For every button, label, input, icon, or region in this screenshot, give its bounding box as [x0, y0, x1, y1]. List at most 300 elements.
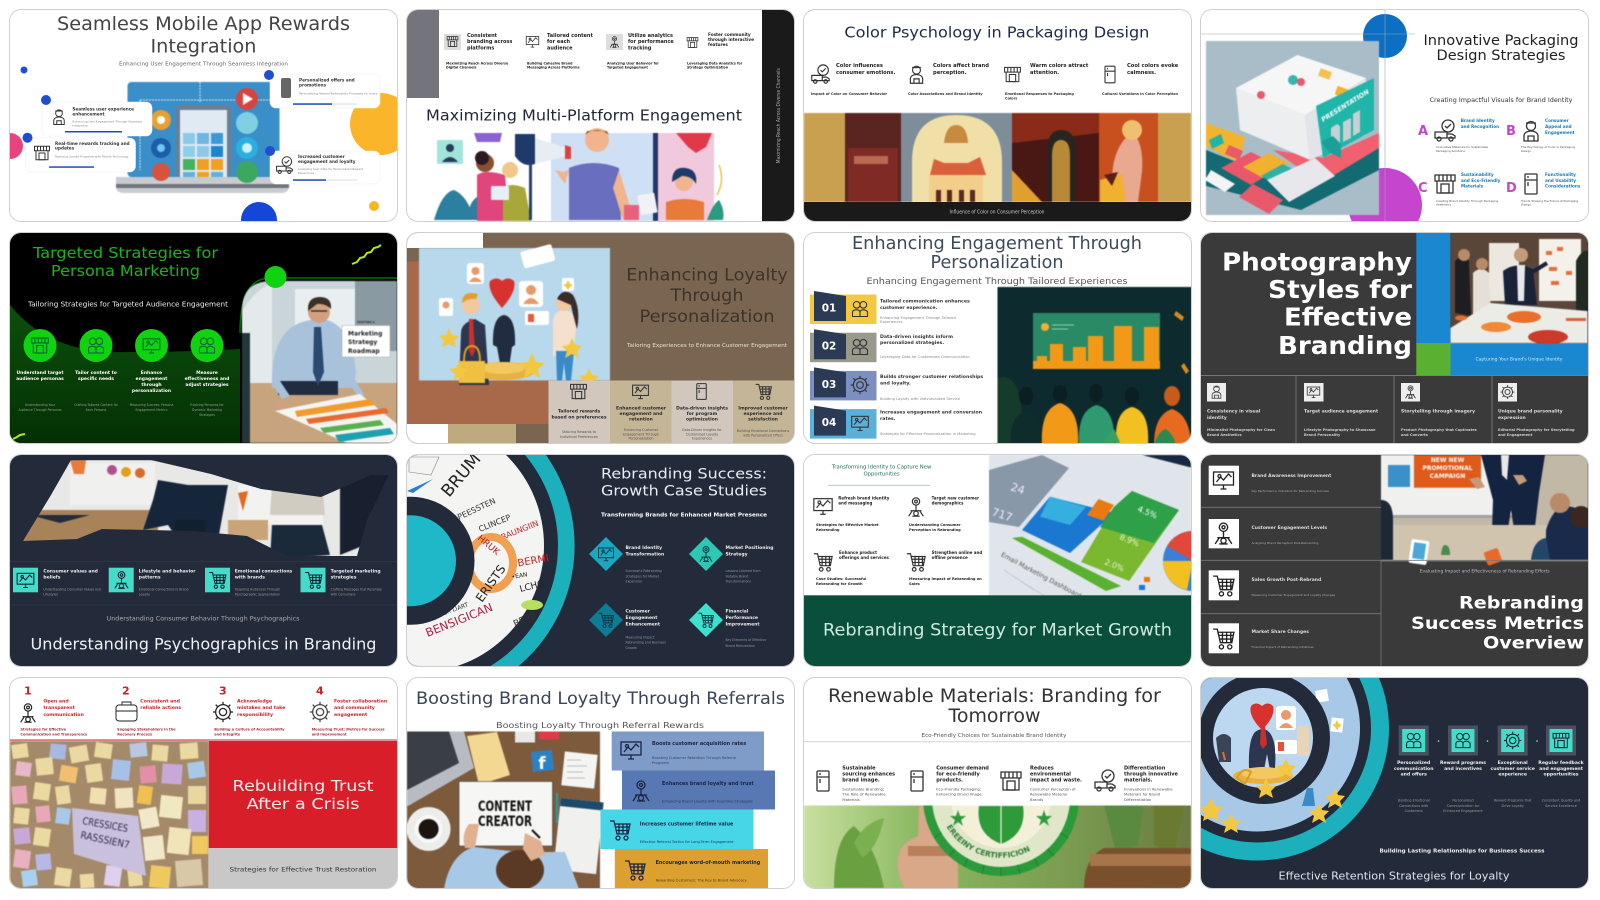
title: Enhancing Loyalty [626, 265, 788, 284]
photo: wall of sticky notes [10, 740, 209, 888]
item: differentiation through materials: Differentiation [1124, 765, 1166, 771]
step 3: Acknowledge [237, 698, 272, 704]
panel: Rebranding Success Growth Case Studies [407, 455, 794, 666]
photo: torn banner of presenters [23, 460, 393, 560]
title: Through [669, 286, 744, 304]
item B: The Psychology of Color in Packaging [1520, 145, 1575, 149]
item: financial performance improvement [689, 603, 766, 648]
item: differentiation through materials: materials. [1124, 777, 1153, 783]
item: consistency in visual identity: identity [1207, 414, 1227, 420]
step 1: 1 [24, 684, 32, 697]
caption band [804, 202, 1191, 221]
item: target new demographics: demographics [932, 500, 964, 506]
item C [1418, 172, 1501, 206]
title: Success Metrics [1411, 614, 1584, 634]
callout: Increased customer engagement and loyalty [265, 146, 380, 184]
photo: green certification rosette [804, 804, 1191, 888]
item: targeted marketing strategies: with Consumers [331, 592, 356, 596]
item D: Considerations [1545, 184, 1581, 188]
item D: Trends Shaping the Future of Packaging [1520, 199, 1578, 203]
item: differentiation through materials: Differentiation [1124, 796, 1152, 802]
column: regular feedback: Regular feedback [1538, 760, 1585, 766]
column: regular feedback: Service Excellence [1545, 803, 1577, 807]
step: measure effectiveness: adjust strategies [185, 382, 229, 388]
column: personalized communication: Connections with [1399, 803, 1428, 807]
row: market share changes: Market Share Changes [1252, 629, 1309, 635]
concentric rings with whiteboard photo: ERISTS [473, 562, 509, 605]
item: customer engagement enhancement: Measuring Impact: [626, 635, 655, 639]
item: lifestyle and behavior patterns: Loyalty [139, 592, 150, 596]
column: reward programs: Reward programs [1440, 760, 1486, 766]
callout: Increased customer engagement and loyalty: Experience [298, 171, 314, 175]
step: measure effectiveness: Evolving Personas for [190, 402, 224, 406]
column: tailored rewards: Tailored rewards [558, 408, 600, 414]
item: target new demographics: Target new customer [932, 496, 979, 500]
item: unique brand personality: Unique brand personality [1498, 408, 1563, 414]
item: brand identity transformation: Strategies for Market [626, 574, 660, 578]
caption: Capturing Your Brand's Unique Identity [1476, 356, 1563, 362]
title [57, 13, 350, 58]
column: data-driven insights: Customized Loyalty [686, 432, 718, 436]
step 4: Foster collaboration [334, 698, 387, 704]
item D: Design [1521, 202, 1531, 206]
item: cool colors evoke calmness: Cultural Variations in Color Perception [1102, 92, 1178, 96]
callout: Seamless user experience enhancement: enhancement [72, 112, 105, 117]
item: enhance product offerings: Case Studies: Successful [816, 577, 866, 581]
item A: Packaging Solutions [1436, 149, 1465, 153]
item: utilize analytics: tracking [628, 46, 652, 52]
item D: Functionality [1545, 172, 1576, 177]
concentric rings with whiteboard photo: PEESSTEN [456, 496, 497, 522]
column: reward programs: Personalized [1452, 798, 1474, 802]
panel: Rebranding Success Metrics Overview [1201, 455, 1588, 666]
concentric rings with whiteboard photo: RAUNGIIN [500, 519, 540, 542]
item: lifestyle and behavior patterns: Emotional Connections in Brand [139, 588, 188, 592]
item: storytelling through imagery [1401, 382, 1477, 436]
title panel: After a Crisis [246, 794, 360, 812]
step 3: mistakes and take [237, 704, 285, 710]
row: sales growth post-rebrand: Sales Growth Post-Rebrand [1252, 577, 1321, 583]
panel: Enhancing Engagement Through Personalization [804, 232, 1191, 443]
step block: boosts customer acquisition [612, 731, 764, 770]
panel: Photography Styles for Effective Branding [1201, 232, 1588, 443]
item: refresh brand identity: and messaging [838, 500, 873, 506]
step: measure effectiveness: Dynamic Marketing [192, 408, 222, 412]
divider lines [1201, 375, 1588, 443]
step: tailor content: specific needs [78, 376, 114, 382]
subtitle: Eco-Friendly Choices for Sustainable Brand Identity [922, 733, 1067, 739]
title: Overview [1483, 633, 1584, 653]
item: consumer values and beliefs: Consumer values and [43, 568, 98, 574]
item: customer engagement enhancement: Growth [626, 646, 637, 650]
column: reward programs: Enhanced Engagement [1443, 808, 1483, 812]
photo: team at whiteboards [1450, 232, 1588, 344]
title: Color Psychology in Packaging Design [844, 23, 1149, 41]
title: Understanding Psychographics in Branding [30, 634, 376, 653]
item: consumer demand: for eco-friendly [936, 771, 980, 777]
step: understand target personas: Audience Through Personas [18, 408, 62, 412]
item: color influences emotions: consumer emotions. [836, 70, 895, 76]
item C: and Eco-Friendly [1461, 178, 1501, 183]
item: warm colors attract attention [1005, 63, 1089, 100]
item B [1506, 118, 1575, 153]
connector dots [1438, 740, 1538, 741]
title band: Rebranding Strategy for Market Growth [823, 621, 1172, 641]
title: Targeted Strategies for [32, 244, 219, 262]
item: brand identity transformation: Expansion [626, 579, 642, 583]
title band [804, 595, 1191, 666]
step block: boosts customer acquisition: Programs [652, 760, 669, 764]
title: Branding [1278, 330, 1412, 360]
item: colors affect brand perception: Color Associations and Brand Identity [908, 92, 983, 96]
item: emotional connections with brands: with brands [235, 574, 265, 580]
step: measure effectiveness: Strategies [199, 412, 215, 416]
step 03: Building Loyalty with Individualized Service [880, 396, 961, 400]
step 1: Communication and Transparency [20, 732, 88, 736]
item: financial performance improvement: Financial [726, 608, 749, 614]
item: consumer demand: products. [936, 777, 963, 783]
column: enhanced customer engagement: Engagement Through [623, 432, 659, 436]
column: exceptional customer service: Exceptional [1498, 760, 1528, 766]
item: consistent branding: branding across [467, 39, 512, 45]
item D [1506, 172, 1581, 206]
step 03: Builds stronger customer relationships [880, 374, 983, 380]
column: personalized communication: and offers [1401, 771, 1427, 777]
subtitle: Transforming Identity to Capture New [831, 464, 932, 470]
callout: Personalized offers and promotions: promotions [299, 83, 326, 88]
column: regular feedback [1538, 725, 1585, 807]
item B: Engagement [1545, 130, 1575, 135]
photo: wall of sticky notes: CRESSICES [81, 816, 129, 834]
column: regular feedback: opportunities [1543, 771, 1579, 777]
concentric rings with whiteboard photo: MER LIART [437, 601, 470, 619]
item: cool colors evoke calmness: Cool colors evoke [1127, 63, 1179, 69]
callout: Increased customer engagement and loyalty: Increased customer [298, 154, 346, 159]
row dividers [1201, 507, 1588, 666]
photo: promotional campaign presentation [1381, 455, 1592, 566]
title: Integration [150, 36, 256, 58]
row: brand awareness improvement [1209, 466, 1332, 495]
item A: Brand Identity [1461, 118, 1495, 123]
photo: man planning marketing roadmap: CRAFTING A [357, 320, 375, 324]
step 1: Open and [43, 698, 69, 704]
title [1411, 593, 1584, 653]
item B: Appeal and [1545, 124, 1572, 129]
concentric rings with whiteboard photo: .BERMI [514, 553, 550, 570]
concentric rings with whiteboard photo: LCHG [519, 579, 545, 595]
item: sustainable sourcing: sourcing enhances [842, 771, 895, 777]
panel: Rebuilding Trust After a Crisis [10, 678, 397, 888]
grey corner block [407, 10, 439, 98]
column: reward programs: and incentives [1444, 766, 1482, 772]
item: market positioning strategy: Notable Brand [726, 574, 748, 578]
photo: email marketing dashboard: 4.5% [1136, 505, 1159, 521]
column: data-driven insights [672, 380, 733, 443]
item: cool colors evoke calmness: calmness. [1127, 70, 1156, 76]
title: Design Strategies [1436, 48, 1566, 64]
item: unique brand personality: expression [1498, 414, 1526, 420]
concentric rings with whiteboard photo [259, 388, 575, 703]
title: Effective Retention Strategies for Loyalty [1278, 869, 1510, 882]
step: enhance engagement: Measuring Success: Persona [130, 402, 174, 406]
item: targeted marketing strategies [300, 568, 382, 596]
illustration: audience watching bar chart [998, 286, 1192, 444]
column: exceptional customer service: customer service [1491, 766, 1535, 772]
item: market positioning strategy [689, 537, 773, 583]
item: unique brand personality: and Engagement [1498, 432, 1533, 436]
green wave background [10, 304, 240, 444]
subtitle: Evaluating Impact and Effectiveness of Rebranding Efforts [1420, 568, 1550, 573]
column: improved customer experience [733, 380, 794, 443]
item: financial performance improvement: Key Elements of Effective [726, 638, 766, 642]
item: refresh brand identity: Rebranding [816, 528, 840, 532]
item: lifestyle and behavior patterns: patterns [139, 574, 161, 580]
subtitle: Transforming Brands for Enhanced Market Presence [601, 512, 767, 518]
item: warm colors attract attention: Warm colors attract [1030, 63, 1089, 69]
photo: man planning marketing roadmap [242, 280, 397, 442]
divider [804, 740, 1191, 742]
column: regular feedback: and engagement [1539, 766, 1584, 772]
item: reduces environmental impact: impact and waste. [1030, 777, 1082, 783]
item: emotional connections with brands: Targeting Audiences Through [234, 588, 280, 592]
concentric rings with loyalty illustration [1125, 596, 1389, 860]
step block: increases lifetime value: Effective Referral Tactics for Long-Term Engagement [640, 840, 734, 844]
step 02: 02 [822, 340, 836, 352]
row: customer engagement levels [1209, 519, 1327, 548]
photo: man planning marketing roadmap: Roadmap [348, 348, 380, 354]
item: consistent branding: Maximizing Reach Across Diverse [446, 62, 509, 66]
step: tailor content [74, 328, 119, 412]
item: utilize analytics: Utilize analytics [628, 33, 673, 39]
column: data-driven insights: for program [687, 410, 718, 416]
step 01 [810, 290, 970, 324]
column: personalized communication: Personalized [1397, 760, 1430, 766]
column: data-driven insights: Experiences [692, 436, 712, 440]
subtitle: Boosting Loyalty Through Referral Rewards [496, 720, 704, 730]
step: measure effectiveness [185, 328, 229, 416]
item: sustainable sourcing: brand image. [842, 777, 880, 783]
callout: Seamless user experience enhancement: Seamless user experience [72, 107, 134, 112]
item: tailored content: Building Cohesive Brand [527, 62, 573, 66]
photo: promotional campaign presentation: NEW NEW [1431, 457, 1465, 464]
column: tailored rewards: Tailoring Rewards to [561, 430, 596, 434]
item C: Sustainability [1461, 172, 1494, 177]
item: warm colors attract attention: Emotional Responses to Packaging [1005, 92, 1074, 96]
column: enhanced customer engagement: engagement and [620, 410, 662, 416]
item: target new demographics: Perception in Rebranding [909, 528, 961, 532]
item: foster community [687, 32, 754, 70]
step block: word-of-mouth marketing: Encourages word-of-mouth marketing [656, 860, 761, 866]
step 1 [20, 684, 88, 736]
step 1: communication [43, 711, 84, 717]
item C: Aesthetics [1436, 202, 1451, 206]
illustration: isometric presentation model: PRESENTATION [1320, 88, 1371, 124]
step 2: Recovery Process [117, 732, 152, 736]
item: tailored content: audience [547, 46, 573, 52]
item: lifestyle and behavior patterns: Lifestyle and behavior [139, 568, 196, 574]
step 4: and community [334, 704, 375, 710]
item: strengthen online and offline presence: offline presence [932, 555, 968, 560]
item: market positioning strategy: Strategy [726, 552, 748, 558]
panel: Targeted Strategies for Persona Marketing [10, 232, 397, 443]
column: enhanced customer engagement: Enhancing Customer [624, 428, 659, 432]
title: Persona Marketing [51, 262, 200, 280]
item: unique brand personality [1498, 382, 1575, 436]
item: sustainable sourcing: The Role of Renewable [841, 791, 886, 796]
column: tailored rewards: Individual Preferences [560, 434, 598, 438]
item: storytelling through imagery: Product Photography that Captivates [1401, 428, 1477, 432]
illustration: team with megaphone [434, 128, 724, 221]
step: understand target personas: Understanding Your [25, 402, 56, 406]
item: refresh brand identity: Strategies for Effective Market [816, 523, 879, 527]
panel: Color Psychology in Packaging Design [804, 10, 1191, 220]
title: Effective [1284, 302, 1412, 331]
item: strengthen online and offline presence: Measuring Impact of Rebranding on [909, 577, 982, 581]
row: brand awareness improvement: Brand Awareness Improvement [1252, 473, 1332, 479]
item: differentiation through materials: Materials for Brand [1124, 791, 1161, 796]
panel: Effective Retention Strategies for Loyalty [1201, 678, 1588, 888]
step 02: Data-driven insights inform [880, 334, 953, 340]
item: tailored content: for each [547, 39, 571, 45]
item: foster community: Leveraging Data Analytics for [687, 62, 743, 66]
step 1: transparent [43, 704, 76, 710]
subtitle: Tailoring Strategies for Targeted Audience Engagement [27, 300, 228, 308]
step block: word-of-mouth marketing [615, 848, 768, 888]
item: colors affect brand perception: Colors affect brand [933, 63, 989, 69]
item: reduces environmental impact: environmental [1030, 771, 1071, 777]
item: consistency in visual identity: Brand Aesthetics [1207, 432, 1242, 436]
item: customer engagement enhancement [589, 603, 666, 650]
illustration: packaging artwork [804, 113, 1191, 202]
item: differentiation through materials: Innovations in Renewable [1124, 786, 1173, 791]
title [1222, 247, 1413, 360]
item: consumer values and beliefs [13, 568, 101, 596]
step 03 [810, 367, 983, 400]
colour blocks [1416, 232, 1588, 375]
column: data-driven insights: Data-driven insights [676, 405, 728, 411]
step: measure effectiveness: effectiveness and [185, 376, 229, 382]
title: Enhancing Engagement Through [852, 233, 1142, 253]
photo: wall of sticky notes: RASSSIEN7 [79, 830, 131, 851]
step 4: 4 [316, 684, 324, 697]
item: brand identity transformation: Successful Rebranding [626, 569, 662, 573]
title: Innovative Packaging [1424, 33, 1578, 49]
step: enhance engagement: engagement [136, 376, 168, 382]
photo: email marketing dashboard [989, 455, 1223, 605]
step 03: 03 [822, 378, 836, 390]
decorative circles and guide lines [1201, 10, 1422, 242]
column: improved customer experience: Building Emotional Connections [737, 428, 789, 432]
step: enhance engagement: personalization [132, 388, 171, 394]
item: utilize analytics: Targeted Engagement [607, 66, 648, 70]
step 04 [810, 405, 982, 438]
column: reward programs [1440, 725, 1486, 812]
item: sustainable sourcing: Sustainable [842, 765, 876, 771]
item: unique brand personality: Editorial Photography for Storytelling [1498, 428, 1575, 432]
item: consistent branding: Digital Channels [446, 66, 476, 70]
item: enhance product offerings: Rebranding for Growth [816, 582, 863, 586]
title panel [209, 740, 397, 848]
step 2: reliable actions [140, 704, 181, 710]
step 02: Leveraging Data for Customized Communication [880, 354, 971, 358]
step 02 [810, 329, 971, 362]
title: Maximizing Multi-Platform Engagement [426, 107, 742, 125]
step: tailor content: Crafting Tailored Content for [74, 402, 119, 406]
concentric rings with whiteboard photo: HRUK [475, 534, 502, 558]
step: enhance engagement: through [141, 382, 162, 388]
step 4: and Improvement [312, 732, 347, 736]
item: sustainable sourcing [817, 765, 895, 802]
item: target audience engagement: Target audience engagement [1304, 408, 1379, 414]
column: enhanced customer engagement: retention [629, 416, 653, 422]
panel: Renewable Materials Branding for Tomorrow [804, 678, 1191, 888]
divider [10, 738, 397, 740]
title: Photography [1222, 247, 1412, 276]
row: brand awareness improvement: Key Performance Indicators for Rebranding Success [1252, 489, 1329, 493]
concentric rings with whiteboard photo: BENSIGICAN [423, 600, 495, 640]
step block: increases lifetime value: Increases customer lifetime value [640, 821, 734, 827]
step 3: and Integrity [214, 732, 241, 736]
item: targeted marketing strategies: Crafting Messages that Resonate [331, 588, 382, 592]
title: Renewable Materials: Branding for [828, 686, 1161, 707]
item: market positioning strategy: Lessons Learned from [726, 569, 760, 573]
item: consumer demand: Eco-Friendly Packaging: [936, 786, 981, 791]
photo: content creator desk [407, 731, 604, 890]
step 01: Enhancing Engagement Through Tailored [880, 316, 956, 320]
item: target audience engagement: Brand Personality [1304, 432, 1341, 436]
item B: Design [1521, 149, 1531, 153]
side band [762, 10, 794, 221]
item: reduces environmental impact [1001, 765, 1082, 802]
item: consumer demand: Consumer demand [936, 765, 989, 771]
title [626, 265, 788, 326]
concentric rings with whiteboard photo: •EAN [511, 571, 528, 581]
divider [828, 484, 930, 486]
item: emotional connections with brands [205, 568, 293, 596]
photo: promotional campaign presentation: CAMPAIGN [1430, 473, 1465, 480]
step 2: 2 [122, 684, 130, 697]
item: differentiation through materials [1095, 765, 1179, 802]
item C: C [1418, 181, 1428, 196]
row: customer engagement levels: Analyzing Brand Perception Post-Rebranding [1252, 541, 1318, 545]
photo: email marketing dashboard: 24 [1009, 480, 1026, 497]
panel: Boosting Brand Loyalty Through Referrals [407, 678, 794, 888]
photo: email marketing dashboard: 717 [990, 505, 1014, 524]
step: tailor content: Tailor content to [75, 370, 117, 376]
column: improved customer experience: satisfaction [748, 416, 778, 422]
step 2: Engaging Stakeholders in the [117, 727, 176, 731]
callout: Increased customer engagement and loyalty: engagement and loyalty [298, 159, 356, 164]
step: understand target personas: audience personas [16, 376, 64, 382]
item: reduces environmental impact: Consumer Perception of [1030, 786, 1076, 791]
column: personalized communication: Customers [1405, 808, 1423, 812]
step 3: responsibility [237, 711, 273, 717]
step block: enhances brand loyalty: Enhancing Brand Loyalty with Incentive Strategies [662, 799, 753, 803]
item: foster community: through interactive [708, 37, 754, 42]
item: consistent branding: platforms [467, 46, 494, 52]
item: customer engagement enhancement: Enhancement [626, 622, 661, 628]
item: consumer values and beliefs: Lifestyles [43, 592, 58, 596]
column: improved customer experience: with Personalized Offers [743, 433, 783, 437]
panel: Understanding Psychographics in Branding [10, 455, 397, 666]
row: market share changes [1209, 623, 1314, 653]
item: colors affect brand perception [908, 63, 989, 96]
item: strengthen online and offline presence [907, 550, 982, 586]
photo: content creator desk: f [538, 754, 546, 774]
item A: Innovative Materials for Sustainable [1436, 145, 1488, 149]
column: improved customer experience: Improved customer [738, 405, 788, 411]
item: consistent branding [444, 33, 512, 70]
